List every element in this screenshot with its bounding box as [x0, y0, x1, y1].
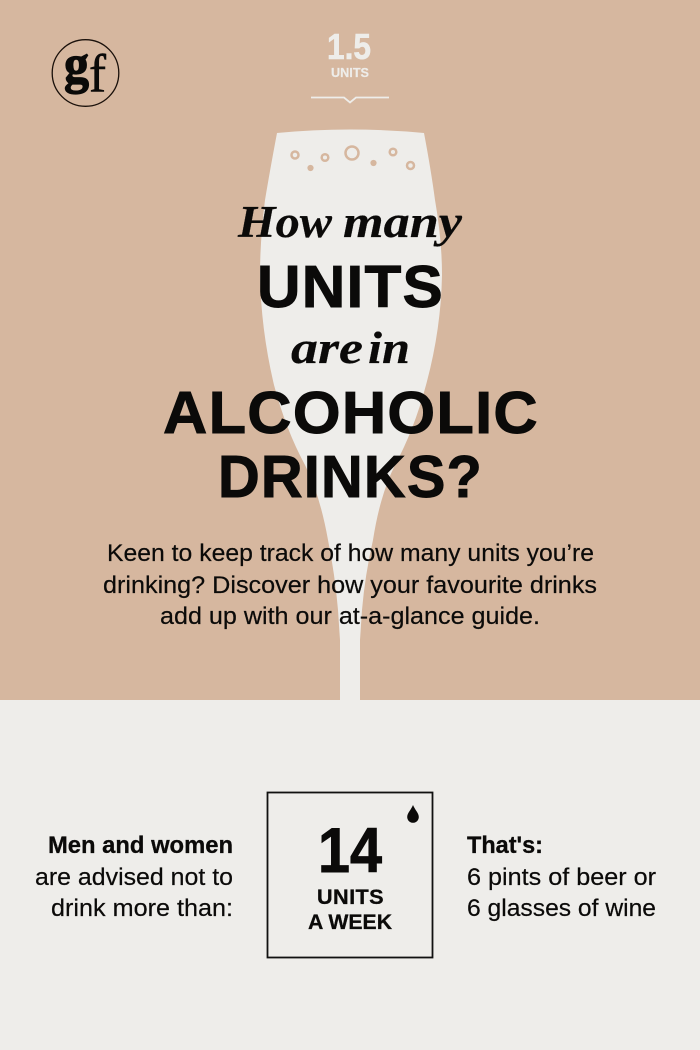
logo: gf roundel: [52, 34, 119, 106]
icon: champagne flute silhouette: [260, 130, 442, 700]
title: [163, 197, 539, 510]
logo: gf roundel: g: [64, 34, 89, 94]
icon: bubbles in the glass: [292, 146, 414, 171]
fill marker: 1.5 units: [311, 26, 389, 102]
callout: 14 units a week: 14: [318, 816, 382, 886]
title: many: [343, 197, 463, 247]
title: How: [237, 197, 333, 247]
fill marker: 1.5 units: 1.5: [327, 26, 371, 67]
title: ALCOHOLIC: [163, 380, 539, 446]
fill marker: 1.5 units: UNITS: [331, 66, 369, 80]
icon: drop: [407, 805, 419, 823]
text: advice to men and women: [35, 832, 233, 922]
intro text: add up with our at-a-glance guide.: [160, 603, 540, 630]
text: equivalent drinks: [467, 832, 656, 922]
text: advice to men and women: drink more than:: [51, 895, 233, 922]
callout: 14 units a week: UNITS: [317, 885, 384, 909]
title: DRINKS?: [218, 444, 483, 510]
intro text: Keen to keep track of how many units you’re: [107, 540, 594, 567]
text: equivalent drinks: 6 glasses of wine: [467, 895, 656, 922]
panel: tan header background: [0, 0, 700, 700]
text: advice to men and women: are advised not to: [35, 864, 233, 891]
intro text: [103, 540, 597, 630]
title: in: [368, 323, 410, 373]
title: UNITS: [257, 254, 444, 320]
title: are: [291, 323, 363, 373]
callout: 14 units a week: [268, 792, 432, 958]
intro text: drinking? Discover how your favourite drinks: [103, 572, 597, 599]
text: advice to men and women: Men and women: [48, 832, 233, 859]
text: equivalent drinks: 6 pints of beer or: [467, 864, 656, 891]
logo: gf roundel: f: [89, 44, 106, 104]
text: equivalent drinks: That's:: [467, 832, 543, 859]
panel: light lower background: [0, 700, 700, 1050]
callout: 14 units a week: A WEEK: [308, 910, 392, 934]
